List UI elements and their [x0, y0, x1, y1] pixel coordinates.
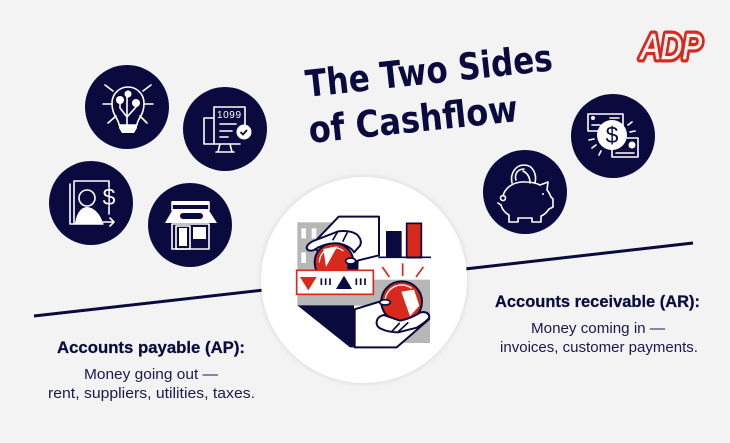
title: The Two Sides [303, 36, 555, 106]
logo: ADP: ADP [639, 26, 702, 67]
icon: 1099 form on monitor: 1099 [217, 110, 241, 121]
icon: 1099 form on monitor [183, 87, 267, 171]
text block: accounts receivable: Accounts receivable (AR): [495, 292, 700, 311]
price sign with arrows [297, 270, 373, 294]
text block: accounts receivable [495, 292, 700, 356]
icon: person with dollar sign: $ [103, 184, 116, 210]
logo: ADP: ADP [639, 26, 702, 67]
title: of Cashflow [306, 87, 520, 152]
rays [382, 263, 423, 277]
text block: accounts payable: Money going out — [84, 366, 219, 383]
upper hand with coin [307, 217, 379, 282]
text block: accounts payable [48, 338, 255, 402]
icon: check, credit card and dollar coin: $ [606, 122, 619, 148]
divider line: right [465, 243, 693, 269]
text block: accounts payable: rent, suppliers, utilities, taxes. [48, 385, 255, 402]
navy wedge [297, 305, 354, 347]
text block: accounts receivable: Money coming in — [531, 320, 666, 337]
title [303, 36, 555, 152]
bar chart [378, 223, 431, 258]
icon: check, credit card and dollar coin [571, 94, 655, 178]
grey building backdrop [297, 222, 430, 343]
lower hand with coin [355, 281, 429, 347]
illustration: two hands exchanging coins [297, 217, 431, 347]
icon: piggy bank [483, 150, 567, 234]
icon: store front [148, 183, 232, 267]
icon: person with dollar sign [49, 161, 133, 245]
central illustration panel [261, 177, 467, 383]
icon: light bulb [85, 65, 169, 149]
divider line: left [34, 290, 264, 316]
text block: accounts payable: Accounts payable (AP): [57, 338, 245, 357]
text block: accounts receivable: invoices, customer payments. [500, 339, 698, 356]
